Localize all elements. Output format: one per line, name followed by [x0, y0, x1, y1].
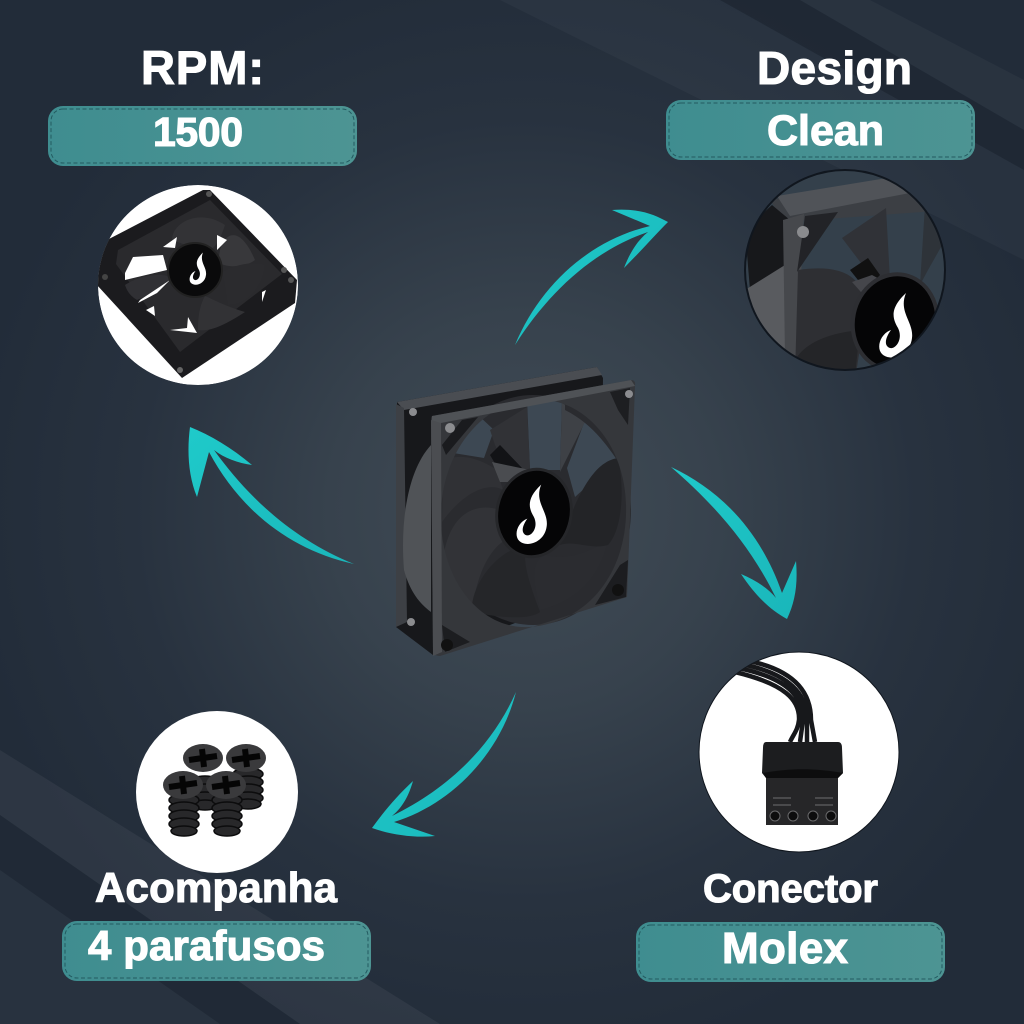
arrow: to design	[515, 210, 668, 345]
pill: 1500	[48, 106, 357, 166]
white slits	[163, 237, 177, 248]
back ring	[403, 445, 431, 612]
arrow: to RPM	[188, 427, 354, 564]
screw front left	[163, 771, 203, 836]
arrow: to connector	[671, 467, 797, 619]
screw front right	[206, 771, 246, 836]
icon: screws circle	[136, 711, 298, 873]
pins	[770, 811, 836, 821]
pill: 1500: 1500	[153, 109, 243, 155]
connector body	[762, 742, 843, 825]
pill: 4 parafusos	[62, 921, 371, 981]
background seen through blades	[447, 400, 618, 497]
wires	[735, 660, 815, 742]
blades	[442, 457, 503, 522]
icon: central fan	[396, 367, 635, 656]
icon: molex connector circle	[699, 652, 899, 852]
heading: RPM: RPM:	[141, 41, 264, 94]
screw back right	[226, 744, 266, 809]
pill: Molex	[636, 922, 945, 982]
hub	[489, 462, 579, 564]
hub	[168, 243, 222, 297]
hub well	[435, 395, 631, 625]
heading: Conector: Conector	[703, 867, 878, 911]
front frame	[431, 380, 635, 656]
pill: Clean	[666, 100, 975, 160]
heading: Design: Design	[757, 42, 912, 94]
pill: 4 parafusos: 4 parafusos	[88, 922, 325, 969]
icon: rotated fan photo circle	[97, 185, 298, 385]
heading: Acompanha: Acompanha	[95, 864, 338, 911]
pill: Clean: Clean	[767, 107, 884, 155]
icon: fan close-up circle	[740, 165, 950, 380]
frame	[97, 190, 297, 378]
arrow: to screws	[372, 692, 516, 837]
back frame	[396, 367, 603, 655]
pill: Molex: Molex	[722, 924, 849, 973]
screw back left	[183, 744, 223, 810]
blades	[172, 218, 224, 248]
